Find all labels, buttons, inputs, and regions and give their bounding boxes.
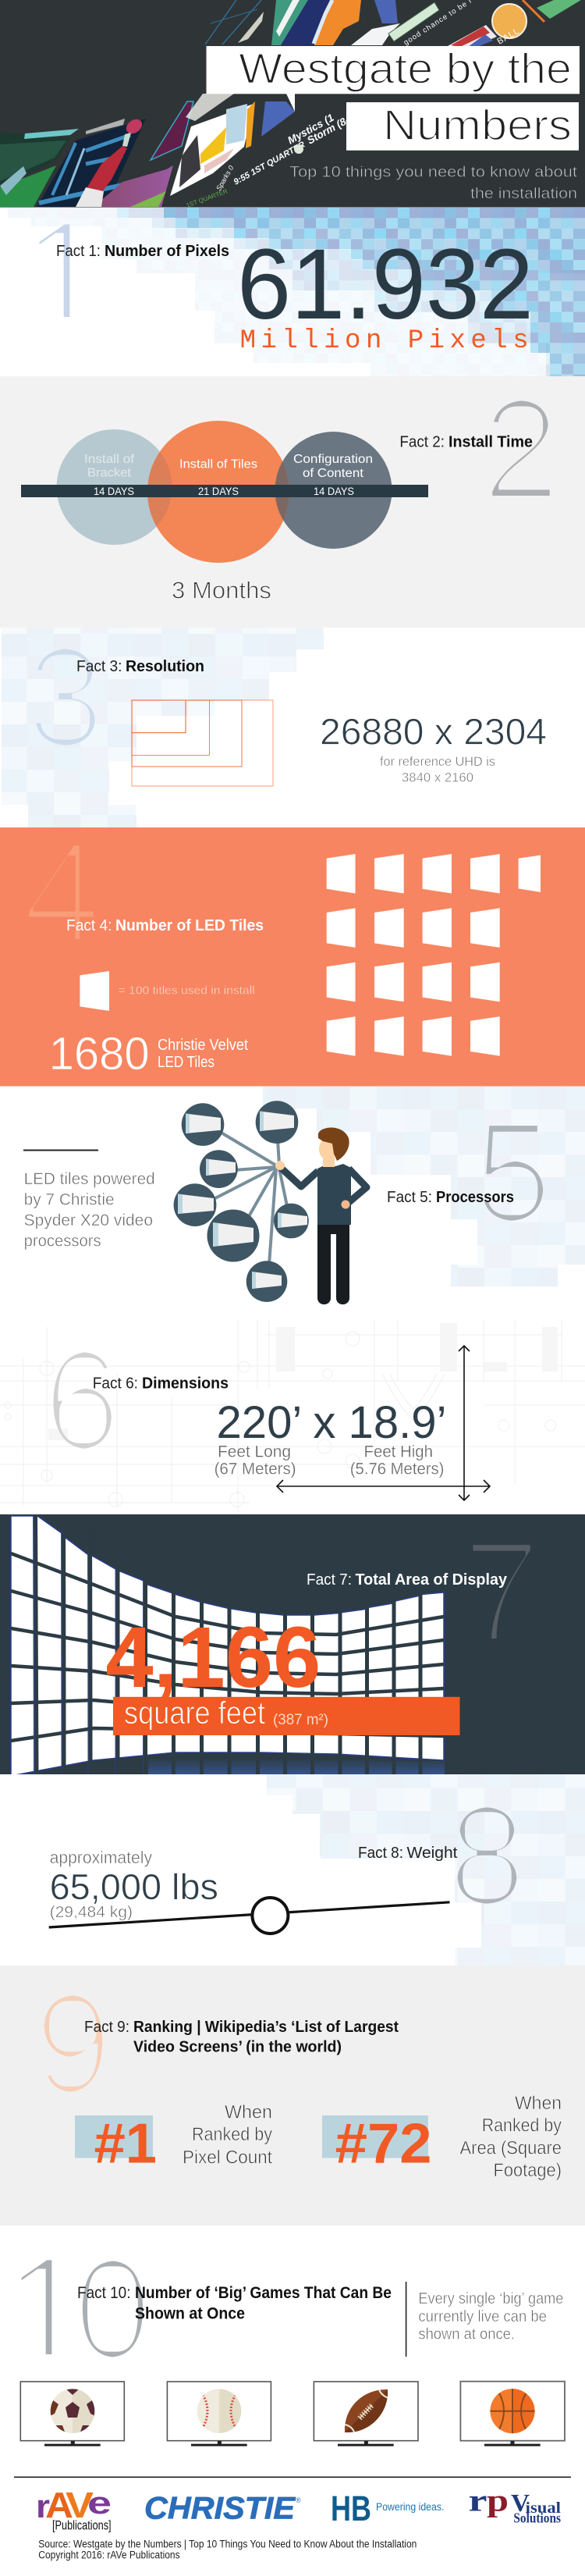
photo collage: stadium video wall: BALL [496, 27, 521, 47]
heading: fact 10: Shown at Once [135, 2305, 245, 2323]
big numeral 10 [22, 2260, 144, 2357]
heading: fact 6: Dimensions [142, 1375, 229, 1393]
stat: 61.932: 61.932 [237, 229, 534, 340]
panel: header photo and title [0, 0, 585, 209]
text: processors description [24, 1170, 155, 1251]
heading: fact 9 [84, 2019, 399, 2056]
total: 3 months: 3 Months [172, 577, 271, 604]
photo collage: stadium video wall: Mystics (1 [285, 112, 336, 147]
heading: fact 8: Fact 8: [358, 1845, 403, 1862]
rule footer [14, 2477, 571, 2478]
text: processors description: LED tiles powered [24, 1170, 155, 1188]
text: ranked by pixel count [183, 2102, 272, 2168]
tv: american football [314, 2382, 418, 2446]
subtitle: Top 10 things you need to know about [289, 164, 578, 181]
heading: fact 1: Fact 1: [56, 243, 101, 260]
text: ranked by area: Footage) [493, 2160, 562, 2181]
tv: basketball [460, 2382, 565, 2446]
heading: fact 10: Number of ‘Big’ Games That Can Be [135, 2284, 392, 2302]
labels: feet long and high: Feet High [363, 1443, 433, 1461]
big numeral 4: 4 [22, 812, 101, 972]
heading: fact 5: Processors [436, 1189, 514, 1206]
heading: fact 9: Fact 9: [84, 2019, 129, 2036]
labels: feet long and high: Feet Long [218, 1443, 291, 1461]
stat: weight [50, 1848, 218, 1921]
stat: weight: 65,000 lbs [50, 1866, 218, 1907]
note: UHD reference: for reference UHD is [380, 754, 495, 769]
heading: fact 5 [387, 1189, 514, 1206]
big numeral 10: 0 [73, 2229, 152, 2389]
logo: rAVe Publications: A [45, 2485, 73, 2525]
logo: rAVe Publications: r [36, 2488, 50, 2524]
stat: 1680 tiles: LED Tiles [158, 1054, 214, 1071]
logo: Christie: CHRISTIE [144, 2492, 296, 2526]
panel: fact 10 big games [14, 2260, 571, 2560]
processor network diagram [174, 1101, 309, 1302]
labels: feet long and high: (5.76 Meters) [350, 1460, 444, 1478]
logo: HB Powering ideas [331, 2489, 444, 2528]
heading: fact 5: Fact 5: [387, 1189, 432, 1206]
heading: fact 6: Fact 6: [93, 1375, 138, 1393]
text: ranked by area: Ranked by [482, 2115, 562, 2136]
logo: rpVisual Solutions: isual [526, 2500, 561, 2517]
big numeral 2: 2 [481, 368, 561, 528]
heading: fact 8: Weight [407, 1845, 458, 1862]
heading: fact 6 [93, 1375, 229, 1393]
text: ranked by area: When [515, 2093, 562, 2114]
big numeral 7: 7 [462, 1511, 541, 1671]
photo collage: stadium video wall: 1ST QUARTER [186, 187, 229, 209]
stat label: million pixels: Million Pixels [240, 326, 529, 356]
photo collage: stadium video wall [0, 0, 581, 209]
legend: one tile equals 100 [80, 971, 255, 1011]
stat: 4,166: 4,166 [105, 1610, 321, 1706]
text: processors description: processors [24, 1233, 101, 1251]
big numeral 1: 1 [20, 189, 108, 363]
heading: fact 10: Fact 10: [77, 2284, 131, 2302]
logo: rpVisual Solutions: V [511, 2489, 530, 2517]
venn timeline: Install of [84, 453, 135, 466]
heading: fact 3: Resolution [126, 658, 204, 675]
logo: HB Powering ideas: Powering ideas. [376, 2501, 444, 2513]
source and copyright: Copyright 2016: rAVe Publications [38, 2549, 180, 2561]
heading: fact 3 [76, 658, 204, 675]
legend: one tile equals 100: = 100 titles used in install [119, 984, 255, 998]
big numeral 8: 8 [448, 1775, 526, 1935]
panel: fact 1 number of pixels [8, 208, 585, 376]
logo: Christie: ® [296, 2496, 301, 2504]
panel: fact 3 resolution [0, 617, 585, 827]
curved LED wall [11, 1514, 445, 1776]
heading: fact 7: Fact 7: [307, 1571, 352, 1589]
big numeral 3: 3 [26, 617, 105, 777]
tv: baseball [167, 2382, 271, 2446]
panel: fact 7 total area [0, 1511, 585, 1776]
logo: rAVe Publications: [Publications] [52, 2518, 112, 2533]
logo: HB Powering ideas: HB [331, 2489, 371, 2528]
stat: 1680 tiles [49, 1028, 248, 1080]
person presenting [275, 1127, 367, 1304]
logo: rpVisual Solutions [468, 2483, 561, 2526]
heading: fact 2: Fact 2: [399, 434, 445, 451]
nested resolution rectangles [132, 700, 273, 786]
venn timeline: Configuration [293, 453, 373, 466]
panel: fact 8 weight [0, 1774, 585, 1966]
text: ranked by pixel count: When [225, 2102, 272, 2123]
venn timeline [21, 421, 428, 563]
stat: 1680 tiles: 1680 [49, 1028, 150, 1080]
big numeral 5: 5 [473, 1092, 553, 1252]
big numeral 10: 1 [2, 2225, 90, 2399]
venn timeline: 21 DAYS [198, 486, 239, 497]
text: ranked by pixel count: Ranked by [192, 2124, 272, 2145]
dimension arrows [277, 1346, 490, 1500]
logo: rpVisual Solutions: p [487, 2483, 509, 2518]
photo collage: stadium video wall: 9:55 1ST QUARTER [232, 140, 307, 187]
text: every big game [418, 2290, 563, 2343]
stat: 220 x 18.9: 220’ x 18.9’ [217, 1397, 446, 1448]
heading: fact 9: Video Screens’ (in the world) [133, 2039, 342, 2056]
logo: rAVe Publications [36, 2485, 112, 2533]
note: UHD reference: 3840 x 2160 [402, 770, 473, 785]
banner: square feet: square feet [124, 1695, 266, 1731]
source and copyright: Source: Westgate by the Numbers | Top 10 Things You Need to Know About the Installation [38, 2538, 417, 2549]
heading: fact 9: Ranking | Wikipedia’s ‘List of Largest [133, 2019, 399, 2036]
text: every big game: Every single ‘big’ game [418, 2290, 563, 2307]
photo collage: stadium video wall: Sparks 0 [214, 164, 235, 192]
tv: soccer [20, 2382, 124, 2446]
text: processors description: by 7 Christie [24, 1191, 115, 1209]
subtitle: the installation [470, 185, 577, 202]
subtitle [289, 164, 578, 202]
logo: rpVisual Solutions: r [468, 2483, 487, 2518]
venn timeline: 14 DAYS [314, 486, 354, 497]
note: UHD reference [380, 754, 495, 785]
blueprint background [0, 1319, 585, 1514]
heading: fact 4: Fact 4: [66, 917, 112, 934]
panel: fact 2 install time [0, 368, 585, 628]
labels: feet long and high [214, 1443, 444, 1478]
balance line [49, 1898, 449, 1934]
title line 1: Westgate by the [239, 44, 572, 93]
heading: fact 2 [399, 434, 533, 451]
heading: fact 3: Fact 3: [76, 658, 122, 675]
panel: fact 5 processors [0, 1087, 585, 1321]
rank: #72: #72 [335, 2113, 432, 2176]
logo: rAVe Publications: V [66, 2485, 94, 2525]
logo: rAVe Publications: e [87, 2486, 112, 2521]
title line 2: Numbers [383, 101, 572, 149]
heading: fact 1: Number of Pixels [105, 243, 229, 260]
stat: weight: approximately [50, 1848, 152, 1867]
stat: weight: (29,484 kg) [50, 1904, 133, 1921]
panel: fact 9 ranking [0, 1963, 585, 2226]
text: processors description: Spyder X20 video [24, 1212, 153, 1229]
stat: 1680 tiles: Christie Velvet [158, 1037, 248, 1054]
text: ranked by area [460, 2093, 562, 2181]
photo collage: stadium video wall: Storm (8- [305, 114, 352, 147]
venn timeline: Bracket [87, 467, 132, 480]
heading: fact 8 [358, 1845, 458, 1862]
rule [23, 1149, 98, 1151]
rank: #1: #1 [94, 2113, 157, 2176]
big numeral 9: 9 [34, 1963, 113, 2123]
heading: fact 4: Number of LED Tiles [115, 917, 264, 934]
text: ranked by area: Area (Square [460, 2138, 562, 2159]
heading: fact 2: Install Time [448, 434, 533, 451]
logo: rpVisual Solutions: Solutions [513, 2510, 561, 2526]
text: ranked by pixel count: Pixel Count [183, 2147, 272, 2168]
tile pictogram grid [327, 854, 541, 1056]
heading: fact 10 [77, 2284, 392, 2323]
venn timeline: Install of Tiles [179, 457, 257, 471]
banner: square feet: (387 m²) [273, 1712, 328, 1728]
banner: square feet [113, 1695, 460, 1735]
stat: 26880 x 2304: 26880 x 2304 [320, 710, 547, 753]
big numeral 6: 6 [42, 1320, 122, 1480]
text: every big game: currently live can be [418, 2308, 547, 2325]
labels: feet long and high: (67 Meters) [214, 1460, 296, 1478]
panel: fact 6 dimensions [0, 1319, 585, 1514]
panel: fact 4 number of LED tiles [0, 812, 585, 1087]
text: every big game: shown at once. [418, 2326, 515, 2343]
venn timeline: of Content [303, 467, 364, 480]
venn timeline: 14 DAYS [94, 486, 134, 497]
source and copyright [38, 2538, 417, 2561]
heading: fact 7: Total Area of Display [356, 1571, 508, 1589]
